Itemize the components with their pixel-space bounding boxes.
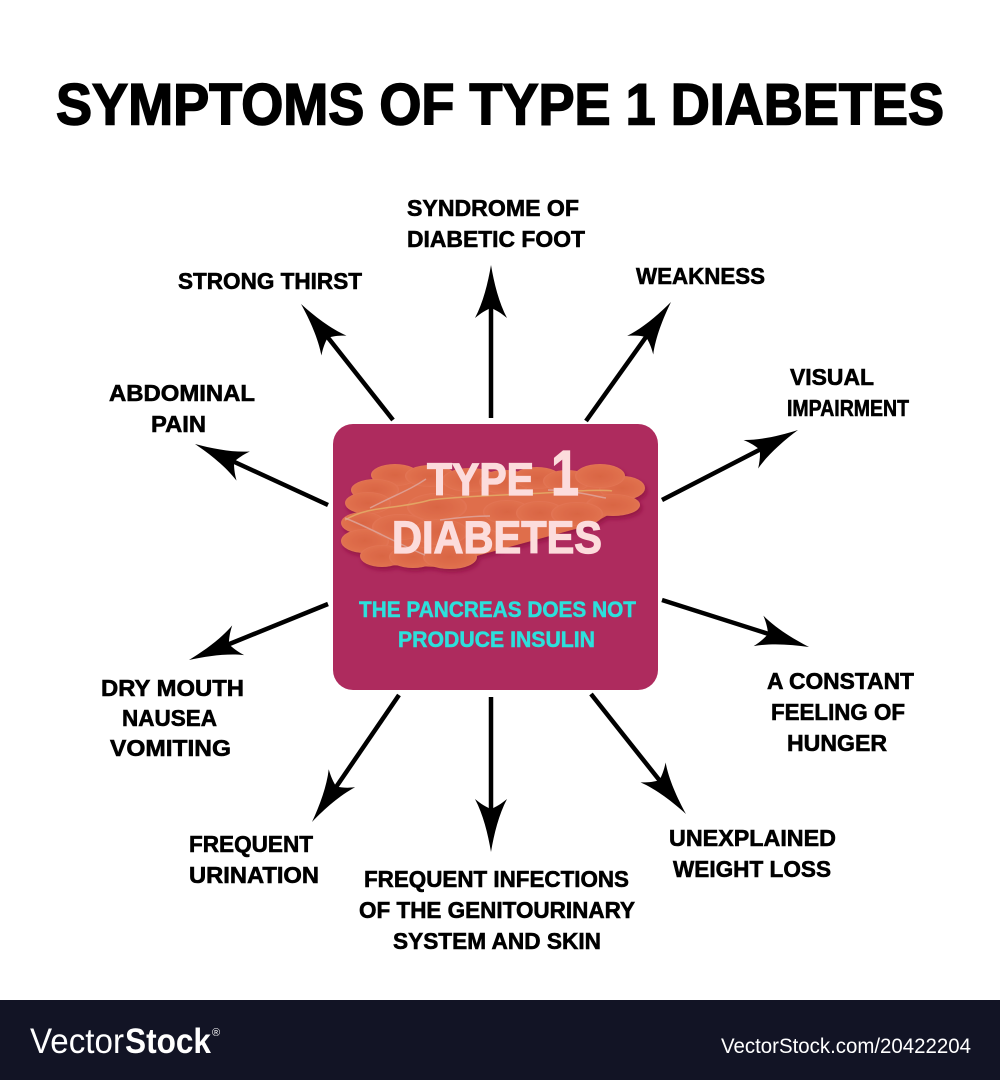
icon: pancreas xyxy=(341,464,645,569)
footer logo xyxy=(30,1022,220,1061)
footer logo: ® xyxy=(212,1027,220,1039)
text: the pancreas does not produce insulin: PRODUCE INSULIN xyxy=(398,627,595,652)
footer logo: Vector xyxy=(30,1022,124,1061)
label: syndrome of diabetic foot xyxy=(407,195,585,252)
arrow: weight loss xyxy=(591,694,699,824)
footer bar xyxy=(0,1000,1000,1080)
arrow: strong thirst xyxy=(288,294,393,420)
arrow: visual impairment xyxy=(662,416,805,500)
label: strong thirst: STRONG THIRST xyxy=(178,268,362,294)
label: abdominal pain xyxy=(109,380,255,437)
footer image id: VectorStock.com/20422204 xyxy=(721,1035,971,1058)
title: SYMPTOMS OF TYPE 1 DIABETES xyxy=(56,72,944,138)
panel: type 1 diabetes xyxy=(333,424,658,690)
arrow: hunger xyxy=(662,600,814,662)
label: syndrome of diabetic foot: SYNDROME OF xyxy=(407,195,579,221)
arrow: abdominal pain xyxy=(188,429,328,505)
arrow: weakness xyxy=(586,293,684,421)
label: dry mouth nausea vomiting xyxy=(101,675,244,761)
label: frequent urination: FREQUENT xyxy=(189,831,313,857)
label: unexplained weight loss: WEIGHT LOSS xyxy=(673,856,831,882)
label: abdominal pain: PAIN xyxy=(151,411,206,437)
heading: diabetes: DIABETES xyxy=(392,512,602,563)
text: the pancreas does not produce insulin xyxy=(359,597,637,652)
label: unexplained weight loss xyxy=(669,825,836,882)
label: syndrome of diabetic foot: DIABETIC FOOT xyxy=(407,226,585,252)
label: visual impairment: VISUAL xyxy=(790,364,874,390)
label: constant feeling of hunger xyxy=(767,668,914,756)
label: frequent urination xyxy=(189,831,319,888)
label: visual impairment xyxy=(787,364,909,421)
label: frequent infections: SYSTEM AND SKIN xyxy=(393,928,601,954)
text: the pancreas does not produce insulin: THE PANCREAS DOES NOT xyxy=(359,597,637,622)
label: dry mouth nausea vomiting: VOMITING xyxy=(110,735,231,761)
label: dry mouth nausea vomiting: NAUSEA xyxy=(122,705,217,731)
label: constant feeling of hunger: A CONSTANT xyxy=(767,668,914,694)
heading: type 1: 1 xyxy=(551,437,579,509)
label: unexplained weight loss: UNEXPLAINED xyxy=(669,825,836,851)
heading: type 1: TYPE xyxy=(427,454,534,505)
arrow: dry mouth xyxy=(183,604,328,675)
label: weakness: WEAKNESS xyxy=(636,263,765,289)
label: frequent infections: FREQUENT INFECTIONS xyxy=(364,866,629,892)
arrow: frequent urination xyxy=(299,695,399,831)
label: constant feeling of hunger: FEELING OF xyxy=(771,699,905,725)
arrow: diabetic foot xyxy=(475,265,507,418)
label: visual impairment: IMPAIRMENT xyxy=(787,395,909,421)
heading: type 1 xyxy=(427,437,579,509)
label: frequent infections xyxy=(359,866,635,954)
label: frequent urination: URINATION xyxy=(189,862,319,888)
label: frequent infections: OF THE GENITOURINARY xyxy=(359,897,635,923)
label: constant feeling of hunger: HUNGER xyxy=(787,730,887,756)
label: abdominal pain: ABDOMINAL xyxy=(109,380,255,406)
label: dry mouth nausea vomiting: DRY MOUTH xyxy=(101,675,244,701)
footer logo: Stock xyxy=(125,1022,211,1061)
arrow: infections xyxy=(475,697,507,852)
